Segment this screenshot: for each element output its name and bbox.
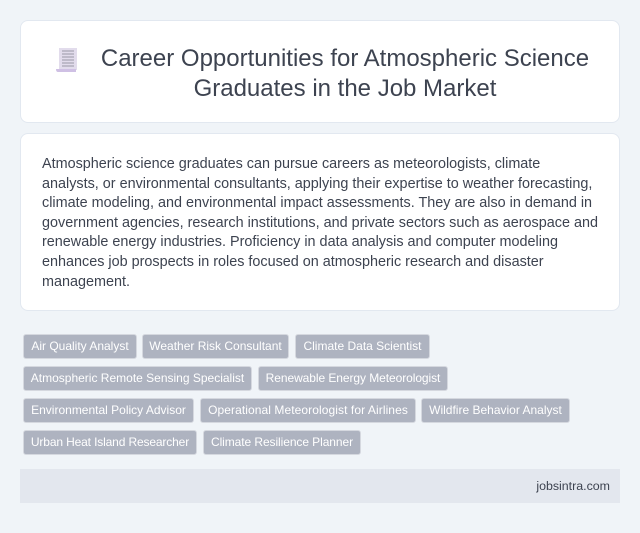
text block: description: Atmospheric science graduates can pursue careers as meteorologists, climate [42, 156, 540, 172]
text block: description: analysts, or environmental consultants, applying their expertise to weather forecasting, [42, 176, 592, 192]
text block: description: management. [42, 274, 130, 290]
tag: Air Quality Analyst [31, 339, 129, 353]
tag [23, 398, 194, 423]
tag: Urban Heat Island Researcher [31, 435, 189, 449]
title: Career Opportunities for Atmospheric Science Graduates in the Job Market [101, 45, 589, 102]
text block: description: enhances job prospects in roles focused on atmospheric research and disaster [42, 254, 544, 270]
tag: Renewable Energy Meteorologist [266, 371, 440, 385]
icon: document scroll [56, 48, 77, 72]
footer [20, 469, 620, 503]
tag [295, 334, 430, 359]
tag [203, 430, 361, 455]
text block: description: renewable energy industries. Proficiency in data analysis and computer modeling [42, 234, 558, 250]
tag: Wildfire Behavior Analyst [429, 403, 562, 417]
text block: description: climate modeling, and environmental impact assessments. They are also in demand in [42, 195, 592, 211]
tag [200, 398, 416, 423]
text block: description [42, 156, 598, 290]
text block: description: government agencies, research institutions, and private sectors such as aerospace and [42, 215, 598, 231]
tag [421, 398, 570, 423]
panel: header [20, 20, 620, 123]
tag: Operational Meteorologist for Airlines [208, 403, 408, 417]
tag [142, 334, 289, 359]
tag [23, 334, 137, 359]
tag [23, 430, 197, 455]
tag: Climate Data Scientist [303, 339, 422, 353]
tag: Atmospheric Remote Sensing Specialist [31, 371, 244, 385]
tag [23, 366, 252, 391]
tag: Climate Resilience Planner [211, 435, 353, 449]
tag [258, 366, 448, 391]
tag: Weather Risk Consultant [149, 339, 282, 353]
footer source: jobsintra.com [536, 479, 610, 493]
tag: Environmental Policy Advisor [31, 403, 186, 417]
panel: description [20, 133, 620, 311]
